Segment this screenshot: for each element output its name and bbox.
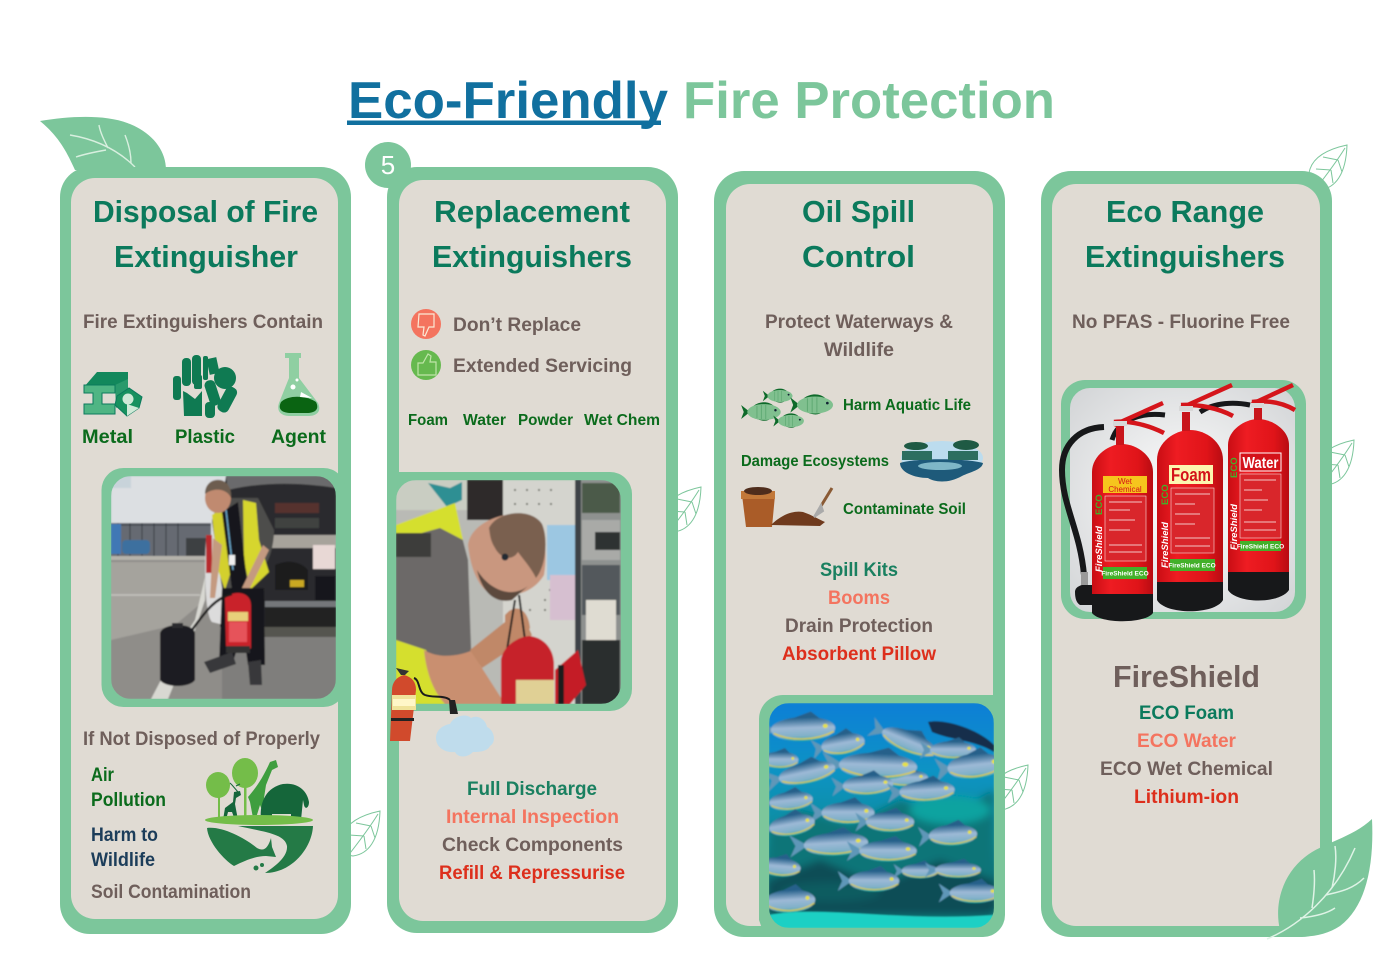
list: spill equipment: Drain Protection [785, 616, 933, 637]
icon: wildlife globe [205, 758, 313, 873]
heading: disposal [93, 194, 318, 274]
icon: ecosystem island [900, 440, 983, 482]
text: don't replace: Don’t Replace [453, 315, 581, 336]
list: service steps: Internal Inspection [446, 807, 619, 828]
photo: three eco extinguishers: FireShield [1229, 504, 1240, 550]
heading: fireshield: FireShield [1113, 659, 1260, 694]
list: service steps [439, 779, 625, 884]
list: fireshield range: ECO Water [1137, 731, 1237, 752]
icon: discharge cloud [436, 716, 494, 756]
photo: three eco extinguishers: Water [1242, 455, 1278, 472]
photo: three eco extinguishers: Chemical [1108, 485, 1142, 494]
photo: three eco extinguishers: ECO [1160, 484, 1171, 505]
subheading: protect waterways: Protect Waterways & [765, 312, 953, 333]
label: agent: Agent [271, 427, 327, 448]
photo background [1070, 388, 1295, 612]
list: harm to wildlife: Wildlife [91, 850, 155, 871]
list: extinguisher types: Foam [408, 412, 448, 429]
photo: three eco extinguishers: FireShield ECO [1237, 544, 1284, 550]
list: extinguisher types [408, 412, 660, 429]
text: extended servicing: Extended Servicing [453, 356, 632, 377]
photo frame: fish [759, 695, 1005, 937]
heading: eco range: Eco Range [1106, 194, 1264, 229]
subheading: protect waterways [765, 312, 953, 361]
icon: flask [278, 353, 319, 416]
heading: replacement: Extinguishers [432, 239, 632, 274]
list: harm to wildlife: Harm to [91, 825, 158, 846]
leaf: top left corner [40, 117, 166, 170]
leaf outline: right of panel 4 [1316, 440, 1354, 486]
photo frame: disposal [102, 468, 346, 707]
heading: disposal: Disposal of Fire [93, 194, 318, 229]
list: fireshield range: Lithium-ion [1134, 787, 1239, 808]
list: extinguisher types: Wet Chem [584, 412, 660, 429]
list: spill equipment: Spill Kits [820, 560, 898, 581]
list: fireshield range: ECO Foam [1139, 703, 1234, 724]
title: Eco-Friendly [348, 72, 668, 130]
panel: disposal of fire extinguisher [60, 167, 351, 934]
leaf outline: right of panel 1 [342, 811, 380, 857]
badge: number 5 [365, 142, 411, 188]
panel: eco range extinguishers [1041, 171, 1332, 937]
title [347, 72, 1055, 130]
photo: school of fish [769, 703, 994, 928]
icon: fish group [741, 389, 833, 428]
heading: replacement: Replacement [434, 194, 630, 229]
photo: three eco extinguishers: ECO [1229, 457, 1240, 478]
list: air pollution [91, 765, 166, 811]
list: air pollution: Air [91, 765, 115, 786]
list: spill equipment: Absorbent Pillow [782, 644, 936, 665]
text: harm aquatic life: Harm Aquatic Life [843, 397, 971, 414]
photo frame: extinguishers [1061, 380, 1306, 619]
list: extinguisher types: Powder [518, 412, 573, 429]
photo: three eco extinguishers [1062, 385, 1295, 621]
photo: technician servicing extinguisher [396, 480, 621, 704]
label: metal: Metal [82, 427, 133, 448]
text: contaminate soil: Contaminate Soil [843, 501, 966, 518]
list: spill equipment [782, 560, 936, 665]
panel: replacement extinguishers [365, 142, 678, 933]
list: service steps: Check Components [442, 835, 623, 856]
leaf outline: right of panel 2 [663, 487, 701, 533]
list: fireshield range: ECO Wet Chemical [1100, 759, 1273, 780]
list: spill equipment: Booms [828, 588, 890, 609]
heading: oil spill: Control [802, 239, 915, 274]
heading: oil spill [802, 194, 915, 274]
subheading: protect waterways: Wildlife [824, 340, 894, 361]
list: extinguisher types: Water [463, 412, 506, 429]
subheading: no pfas: No PFAS - Fluorine Free [1072, 312, 1290, 333]
list: service steps: Full Discharge [467, 779, 597, 800]
photo: three eco extinguishers: FireShield [1094, 526, 1105, 572]
icon: thumbs up [411, 350, 441, 380]
heading: replacement [432, 194, 632, 274]
list: soil contamination: Soil Contamination [91, 882, 251, 903]
heading: oil spill: Oil Spill [802, 194, 915, 229]
text: damage ecosystems: Damage Ecosystems [741, 453, 889, 470]
icon: soil pot and trowel [741, 487, 832, 527]
photo frame: servicing [387, 472, 632, 711]
photo: three eco extinguishers: FireShield ECO [1101, 570, 1149, 578]
list: air pollution: Pollution [91, 790, 166, 811]
icon: small extinguisher [390, 668, 458, 741]
photo: three eco extinguishers: Wet [1118, 477, 1133, 486]
leaf outline: top right [1309, 145, 1347, 191]
list: fireshield range [1100, 703, 1273, 808]
list: service steps: Refill & Repressurise [439, 863, 625, 884]
label: plastic: Plastic [175, 427, 235, 448]
heading: disposal: Extinguisher [114, 239, 298, 274]
badge: number 5: 5 [381, 150, 395, 180]
icon: plastic [173, 355, 239, 418]
photo: three eco extinguishers: ECO [1094, 494, 1105, 515]
title: Fire Protection [683, 72, 1055, 130]
icon: thumbs down [411, 309, 441, 339]
photo: three eco extinguishers: FireShield [1160, 522, 1171, 568]
photo: technician discharging extinguisher [111, 476, 336, 699]
leaf: bottom right corner [1267, 819, 1372, 939]
list: harm to wildlife [91, 825, 158, 871]
panel: oil spill control [714, 171, 1005, 937]
icon: metal [84, 372, 142, 416]
photo: three eco extinguishers: FireShield ECO [1168, 562, 1216, 570]
leaf outline: right of panel 3 [990, 765, 1028, 811]
subheading: contain: Fire Extinguishers Contain [83, 312, 323, 333]
subheading: if not disposed: If Not Disposed of Properly [83, 729, 320, 750]
heading: eco range: Extinguishers [1085, 239, 1285, 274]
photo: three eco extinguishers: Foam [1171, 465, 1211, 485]
heading: eco range [1085, 194, 1285, 274]
